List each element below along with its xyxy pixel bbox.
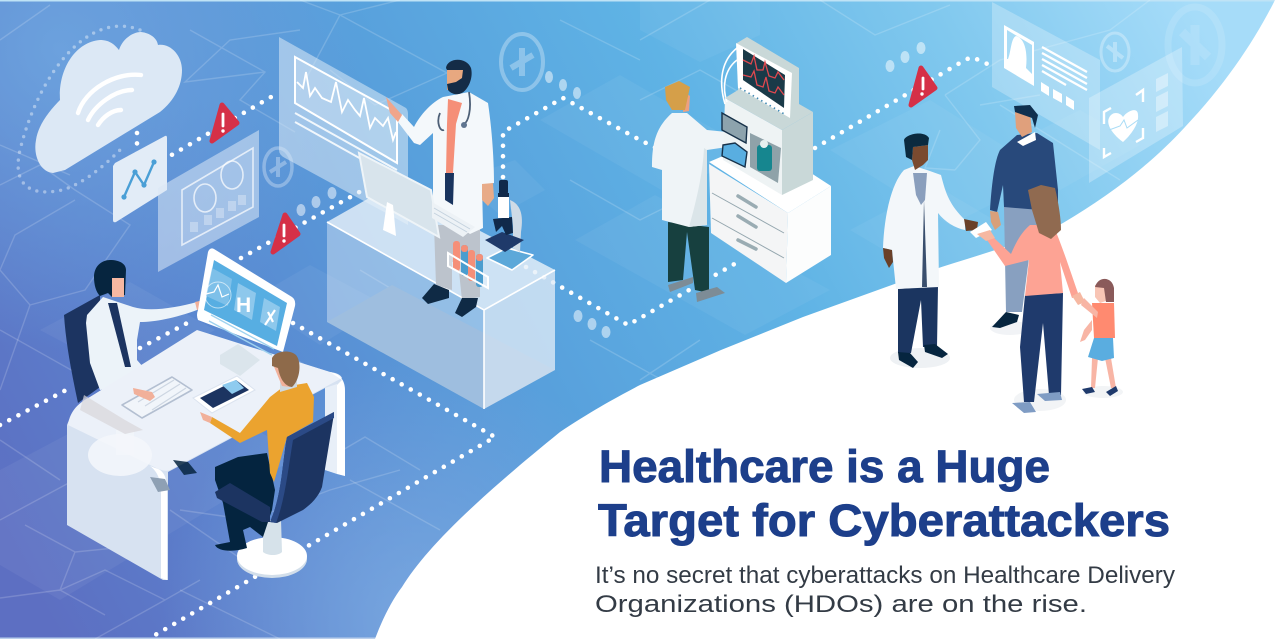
medical monitoring machine on white cabinet <box>709 37 831 283</box>
doctor shaking hands <box>883 134 992 368</box>
seated male patient with chair <box>200 351 334 578</box>
white curved area <box>375 0 1277 639</box>
glass lab desk <box>327 185 555 409</box>
heading: Target for Cyberattackers <box>598 495 1170 546</box>
keyboard and tablet on desk <box>122 376 255 418</box>
intro text <box>595 562 1175 618</box>
panel: heart scan screen <box>1089 47 1183 183</box>
icon: alert triangle 3 <box>911 68 935 105</box>
man in blue sweater <box>990 105 1058 335</box>
seated female doctor with chair <box>64 260 217 403</box>
microscope <box>485 180 533 270</box>
desktop computer (back view) <box>359 153 475 237</box>
mother with long hair <box>977 185 1085 413</box>
intro text: Organizations (HDOs) are on the rise. <box>595 591 1087 618</box>
doctor with beard <box>386 60 494 317</box>
icon: plus badges <box>264 7 1222 186</box>
dotted ring around cloud <box>18 26 140 192</box>
heading <box>598 441 1170 546</box>
intro text: It’s no secret that cyberattacks on Healthcare Delivery <box>595 562 1175 589</box>
connector beads <box>296 42 926 338</box>
icon: alert triangle 2 <box>273 215 298 252</box>
test tubes in rack <box>448 241 488 288</box>
desk computer with medical screen: H <box>236 294 251 317</box>
heading: Healthcare is a Huge <box>599 441 1050 492</box>
panel: patient profile screen <box>992 2 1100 150</box>
desk computer with medical screen <box>197 248 295 376</box>
panel: translucent dials screen <box>158 130 259 272</box>
dotted network connection lines <box>0 57 994 638</box>
panel: line chart card <box>113 136 167 222</box>
panel: heartbeat monitor screen <box>279 37 408 225</box>
child holding hand <box>1080 279 1123 398</box>
white reception desk <box>67 330 345 580</box>
icon: alert triangle 1 <box>212 105 237 141</box>
doctor at machine, seen from behind <box>652 81 765 302</box>
icon: cloud with wifi <box>35 32 182 173</box>
